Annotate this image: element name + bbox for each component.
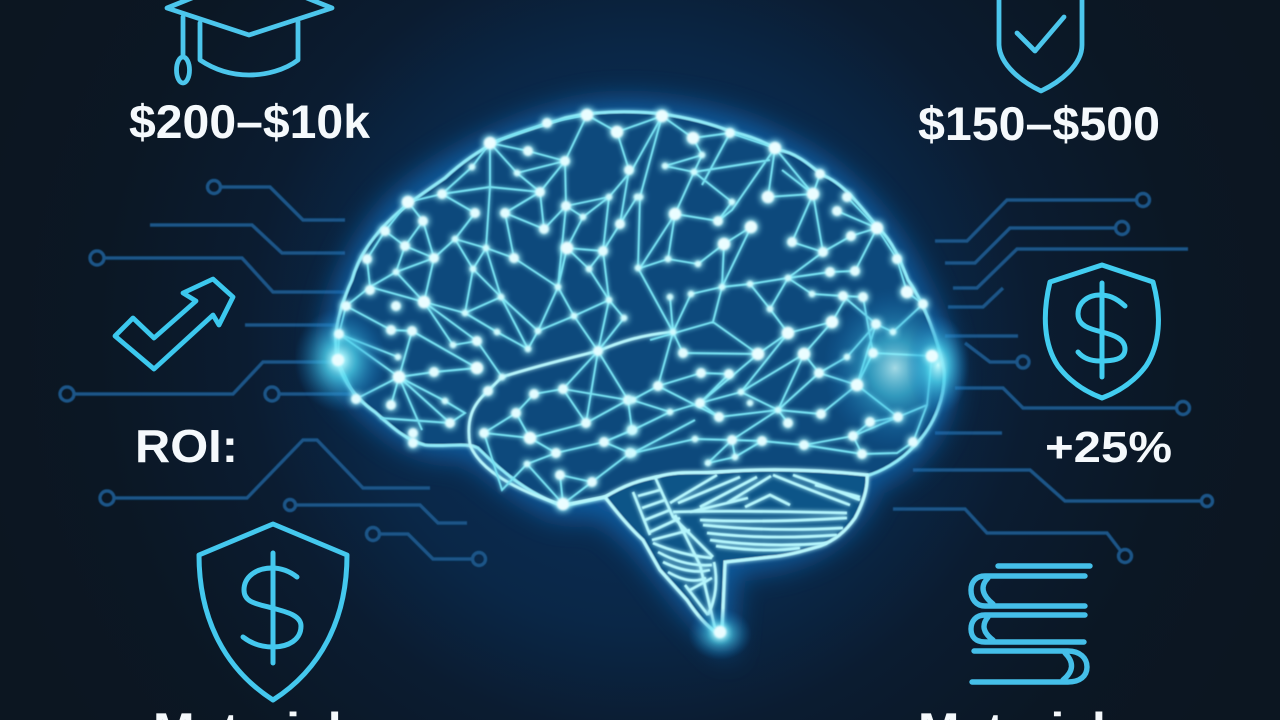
brain lobe contours (469, 332, 673, 505)
brain folia lines (633, 475, 860, 628)
text: education cost: $200–$10k (129, 95, 371, 148)
brain neuron nodes small (396, 155, 893, 464)
icon: shield check (999, 0, 1082, 91)
text: ROI label: ROI: (135, 420, 238, 472)
brain neuron nodes medium (339, 123, 923, 482)
brain (294, 112, 970, 660)
icon: rising check arrow (115, 279, 233, 369)
brain neuron nodes large (338, 115, 932, 632)
brain outer halo (336, 112, 940, 632)
text: certification cost: $150–$500 (918, 97, 1160, 150)
brain cerebrum body (336, 112, 944, 506)
brain cerebellum body (605, 470, 867, 633)
icon: dollar shield right (1045, 265, 1158, 398)
icon: graduation cap (167, 0, 332, 83)
brain hot glow flares (294, 288, 970, 660)
brain neural network lines (338, 115, 932, 504)
text: growth percentage: +25% (1045, 423, 1172, 472)
icon: dollar shield left (199, 524, 347, 700)
circuit traces right (893, 194, 1212, 562)
icon: stack of books (971, 566, 1090, 682)
circuit traces left (60, 180, 486, 566)
